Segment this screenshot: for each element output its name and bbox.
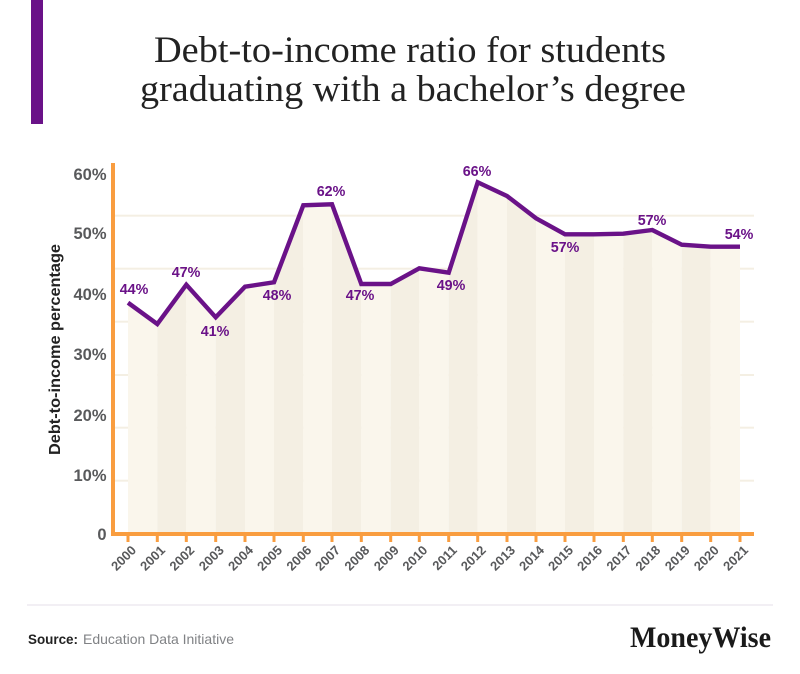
data labels: 49%: [437, 278, 466, 294]
source: Source:: [28, 631, 78, 647]
x axis labels: 2008: [341, 543, 372, 574]
x axis labels: 2011: [429, 543, 460, 573]
x axis labels: 2014: [516, 542, 548, 574]
title: [140, 30, 686, 110]
data labels: 47%: [172, 265, 201, 281]
x axis labels: 2004: [225, 542, 257, 574]
footer divider: [27, 604, 773, 606]
shaded area under line: [128, 170, 740, 532]
data labels: 41%: [201, 324, 230, 340]
y axis labels: 20%: [73, 407, 107, 425]
data labels: 54%: [725, 227, 754, 243]
y axis labels: 30%: [73, 346, 107, 364]
x axis labels: 2013: [487, 543, 518, 574]
x axis labels: 2017: [603, 543, 634, 574]
data labels: 44%: [120, 282, 149, 298]
data labels: 66%: [463, 164, 492, 180]
logo: MoneyWise: MoneyWise: [630, 621, 771, 654]
axes: [111, 163, 754, 542]
data labels: 48%: [263, 288, 292, 304]
data labels: [120, 164, 754, 340]
x axis labels: 2015: [545, 543, 576, 574]
source: Education Data Initiative: [83, 631, 234, 647]
x axis labels: 2006: [283, 543, 314, 574]
data labels: 62%: [317, 184, 346, 200]
x axis labels: [108, 542, 751, 574]
title: Debt-to-income ratio for students: [154, 30, 666, 71]
data labels: 57%: [551, 240, 580, 256]
x axis labels: 2012: [458, 543, 489, 574]
y axis title: Debt-to-income percentage: [47, 244, 64, 455]
x axis labels: 2018: [632, 543, 663, 574]
data line: [128, 182, 740, 324]
x axis labels: 2002: [166, 543, 197, 574]
x axis labels: 2009: [371, 543, 402, 574]
y axis labels: 10%: [73, 467, 107, 485]
x axis labels: 2001: [137, 543, 168, 574]
x axis labels: 2005: [254, 543, 285, 574]
data labels: 57%: [638, 213, 667, 229]
title: graduating with a bachelor’s degree: [140, 69, 686, 110]
y axis labels: 40%: [73, 286, 107, 304]
x axis labels: 2019: [662, 543, 693, 574]
line chart: [47, 163, 754, 574]
x axis labels: 2016: [574, 543, 605, 574]
y axis labels: 50%: [73, 225, 107, 243]
x axis labels: 2010: [399, 543, 430, 574]
x axis labels: 2007: [312, 543, 343, 574]
x axis labels: 2021: [720, 543, 751, 574]
y axis labels: [73, 166, 107, 544]
x axis labels: 2000: [108, 543, 139, 574]
accent bar: [31, 0, 43, 124]
x axis labels: 2003: [196, 543, 227, 574]
y axis labels: 0: [97, 526, 106, 544]
data labels: 47%: [346, 288, 375, 304]
y axis labels: 60%: [73, 166, 107, 184]
x axis labels: 2020: [691, 543, 722, 574]
